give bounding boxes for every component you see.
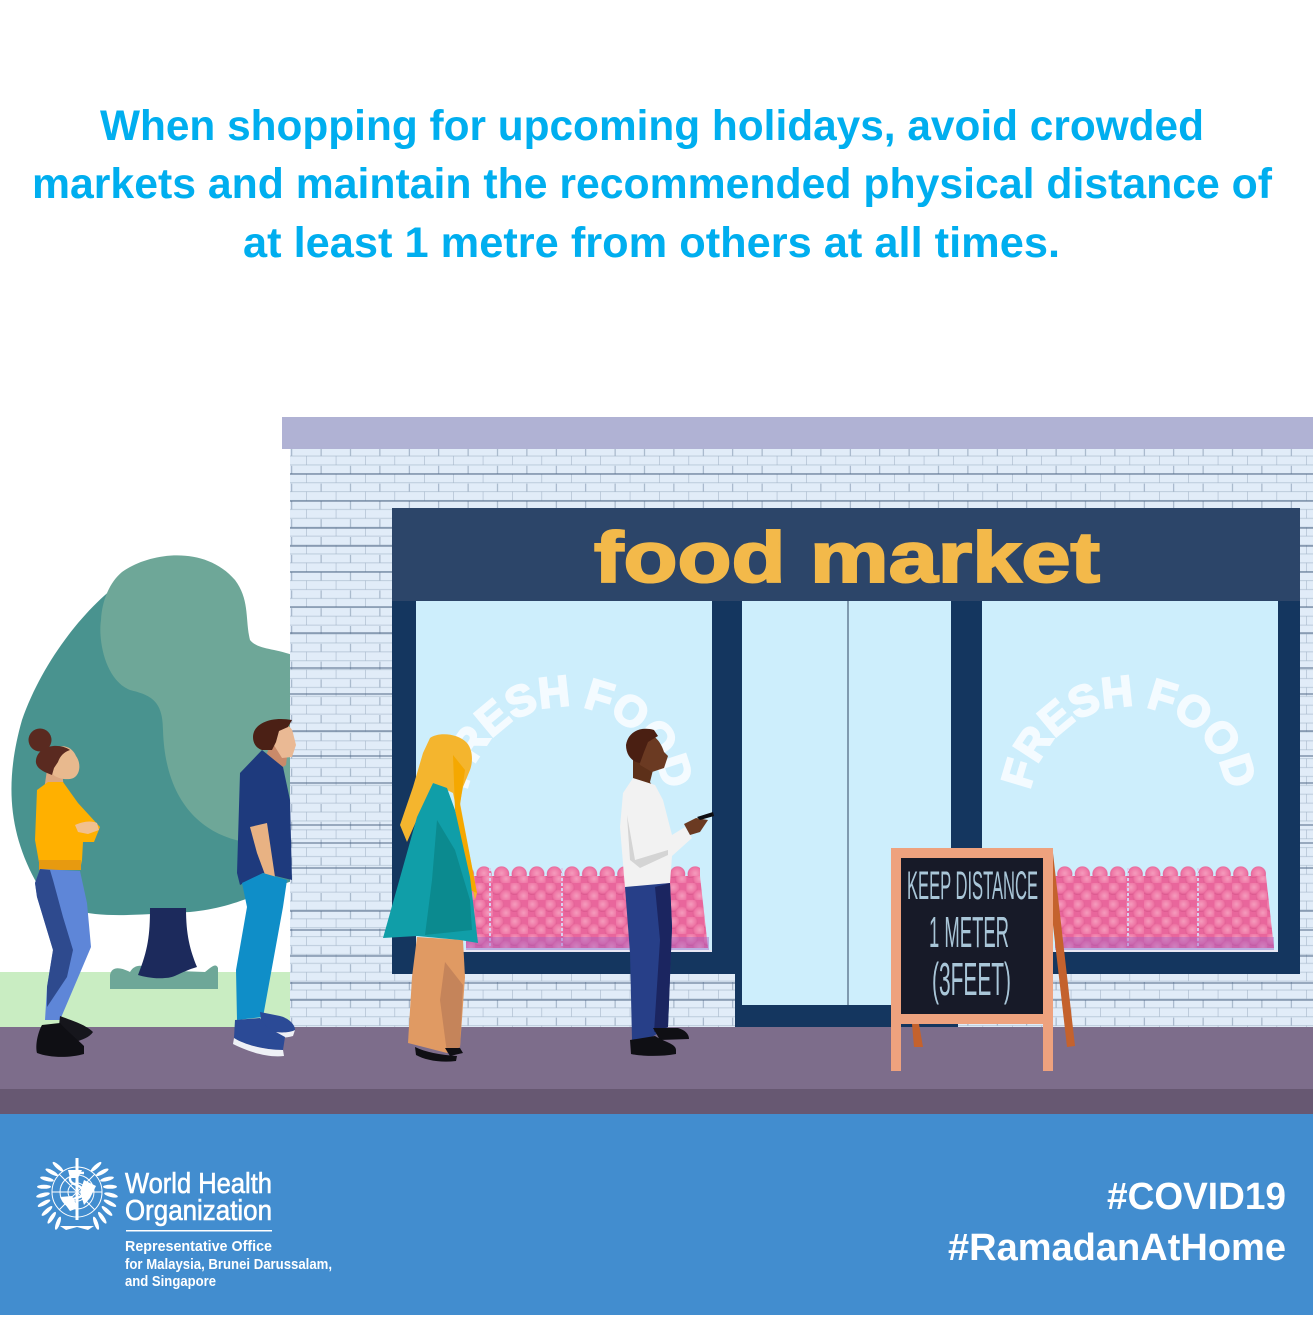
continents (60, 1170, 96, 1211)
headline: When shopping for upcoming holidays, avoid crowded (100, 102, 1204, 150)
headline (32, 102, 1273, 267)
grass strip (0, 972, 295, 1028)
hashtags: #COVID19 (1107, 1176, 1286, 1218)
roof (282, 417, 1313, 449)
brick wall (290, 448, 1313, 1028)
hashtags: #RamadanAtHome (948, 1227, 1286, 1269)
sign text: (3FEET) (932, 953, 1011, 1005)
WHO emblem (36, 1158, 118, 1230)
wreath (36, 1161, 118, 1230)
person: man in navy shirt (233, 719, 296, 1056)
pavement (0, 1027, 1313, 1115)
sandwich board sign (891, 848, 1075, 1071)
building (282, 417, 1313, 1027)
window lettering left: FRESH FOOD (456, 674, 691, 789)
store name: food market (594, 519, 1100, 598)
globe (52, 1167, 102, 1217)
WHO wordmark: Representative Office (125, 1238, 272, 1255)
staff and serpent (70, 1158, 84, 1220)
shop frame (392, 601, 1300, 974)
sign band (392, 508, 1300, 601)
frame (891, 848, 1053, 1071)
door threshold (735, 974, 958, 1027)
sign text (907, 864, 1038, 1005)
back legs (912, 853, 1075, 1047)
right window (982, 601, 1278, 952)
footer band (0, 1114, 1313, 1315)
hashtags (948, 1176, 1286, 1269)
person: woman in hijab (383, 734, 478, 1062)
person: man in white shirt with phone (620, 729, 714, 1056)
WHO wordmark: for Malaysia, Brunei Darussalam, (125, 1256, 332, 1273)
fruit crates left (416, 866, 712, 952)
sign text: 1 METER (929, 908, 1009, 957)
sandwich board sign: KEEP DISTANCE (907, 864, 1038, 908)
headline: at least 1 metre from others at all times. (243, 219, 1060, 267)
tree (11, 555, 295, 989)
fruit crates right (1053, 866, 1278, 952)
WHO wordmark (125, 1168, 332, 1290)
WHO wordmark: and Singapore (125, 1273, 216, 1290)
left window (416, 601, 712, 952)
WHO wordmark: Organization (125, 1195, 272, 1227)
chalkboard (901, 858, 1043, 1014)
headline: markets and maintain the recommended physical distance of (32, 160, 1273, 208)
window lettering right: FRESH FOOD (1000, 674, 1254, 789)
person: woman in yellow sweater (28, 728, 100, 1057)
door (742, 601, 951, 1005)
WHO wordmark: World Health (125, 1168, 272, 1200)
